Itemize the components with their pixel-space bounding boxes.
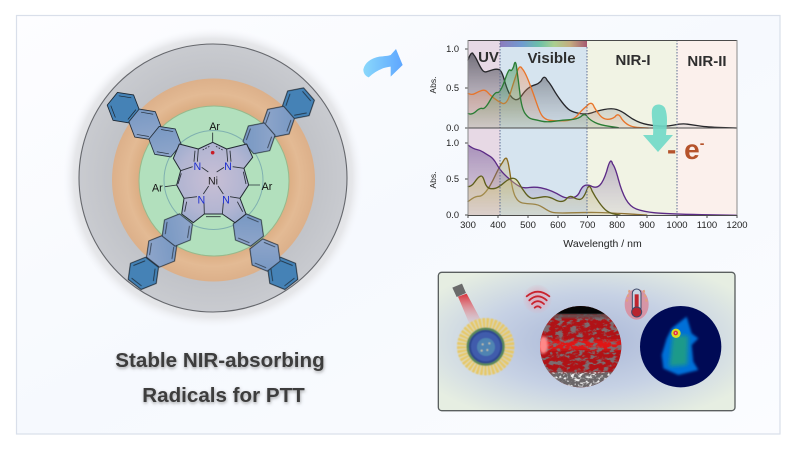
outer halo	[63, 28, 363, 328]
rainbow bar	[500, 40, 587, 47]
region labels: UV	[478, 49, 499, 66]
atom labels: N	[224, 161, 232, 173]
x axis labels: 600	[550, 220, 566, 231]
atom labels: Ar	[152, 183, 163, 195]
y axis labels: 0.0	[446, 210, 459, 220]
x axis labels: 900	[639, 220, 655, 231]
gray ring	[79, 44, 347, 312]
molecule concentric circles and structure	[63, 28, 363, 328]
icon: curved blue arrow	[363, 49, 403, 77]
y axis titles	[428, 76, 438, 189]
porphyrin core	[173, 142, 253, 223]
electron label: -	[700, 135, 705, 151]
gold curve	[468, 158, 647, 215]
purple curve	[468, 145, 737, 215]
atom labels: Ar	[262, 181, 273, 193]
arrow: electron removal	[643, 104, 673, 152]
atom labels: N	[222, 194, 230, 206]
ultrasound image circle	[539, 305, 622, 389]
title: Radicals for PTT	[142, 384, 305, 407]
x axis title: Wavelength / nm	[563, 238, 642, 250]
y axis labels: 0.0	[446, 123, 459, 133]
axes and ticks	[465, 40, 737, 218]
icon: heat waves	[523, 285, 552, 313]
arm: upper right fused rings	[238, 82, 320, 160]
nanoparticle	[462, 323, 510, 371]
upper spectra	[468, 53, 737, 128]
x axis labels	[460, 220, 748, 231]
y axis labels: 0.5	[446, 174, 459, 184]
region labels: NIR-I	[616, 52, 650, 69]
atom labels: Ar	[209, 121, 220, 133]
atom labels: N	[193, 161, 201, 173]
y axis titles: Abs.	[428, 171, 438, 189]
icon: laser	[452, 284, 480, 324]
atom labels: Ni	[208, 176, 218, 188]
orange curve	[468, 67, 648, 128]
lower spectra	[468, 145, 737, 215]
region labels: NIR-II	[687, 53, 727, 70]
arm: upper left fused rings	[102, 86, 186, 163]
y axis labels: 0.5	[446, 83, 459, 93]
olive curve	[468, 176, 620, 215]
y axis titles: Abs.	[428, 76, 438, 94]
x axis labels: 1100	[697, 220, 717, 231]
y axis labels: 1.0	[446, 138, 459, 148]
y axis labels	[446, 44, 459, 220]
icon: thermometer	[625, 288, 649, 320]
x axis labels: 500	[520, 220, 536, 231]
absorbance chart	[428, 40, 748, 250]
inner teal circle line	[164, 130, 263, 230]
x axis labels: 800	[609, 220, 625, 231]
x axis labels: 700	[580, 220, 595, 231]
title	[115, 349, 325, 407]
green curve	[468, 62, 618, 128]
region labels: Visible	[527, 50, 576, 67]
green ring	[139, 106, 289, 256]
arm: lower left fused rings	[122, 209, 199, 295]
arm: lower right fused rings	[227, 209, 304, 295]
panel background	[438, 272, 735, 411]
thermal image circle	[640, 306, 721, 387]
electron label: - e	[667, 134, 700, 165]
y axis labels: 1.0	[446, 44, 459, 54]
x axis labels: 300	[460, 220, 476, 231]
panel: photothermal therapy	[438, 272, 735, 411]
x axis labels: 1000	[666, 220, 688, 231]
orange ring	[112, 78, 315, 282]
region labels	[478, 49, 727, 70]
atom labels	[152, 121, 273, 206]
radical dot	[211, 151, 214, 154]
x axis labels: 400	[490, 220, 506, 231]
bonds	[165, 133, 260, 217]
molecule: nickel porphyrin radical	[102, 82, 320, 295]
title: Stable NIR-absorbing	[115, 349, 325, 372]
black curve	[468, 53, 737, 128]
spectral band backgrounds	[468, 40, 737, 215]
band dividers	[500, 40, 677, 215]
x axis labels: 1200	[726, 220, 748, 231]
atom labels: N	[197, 194, 205, 206]
